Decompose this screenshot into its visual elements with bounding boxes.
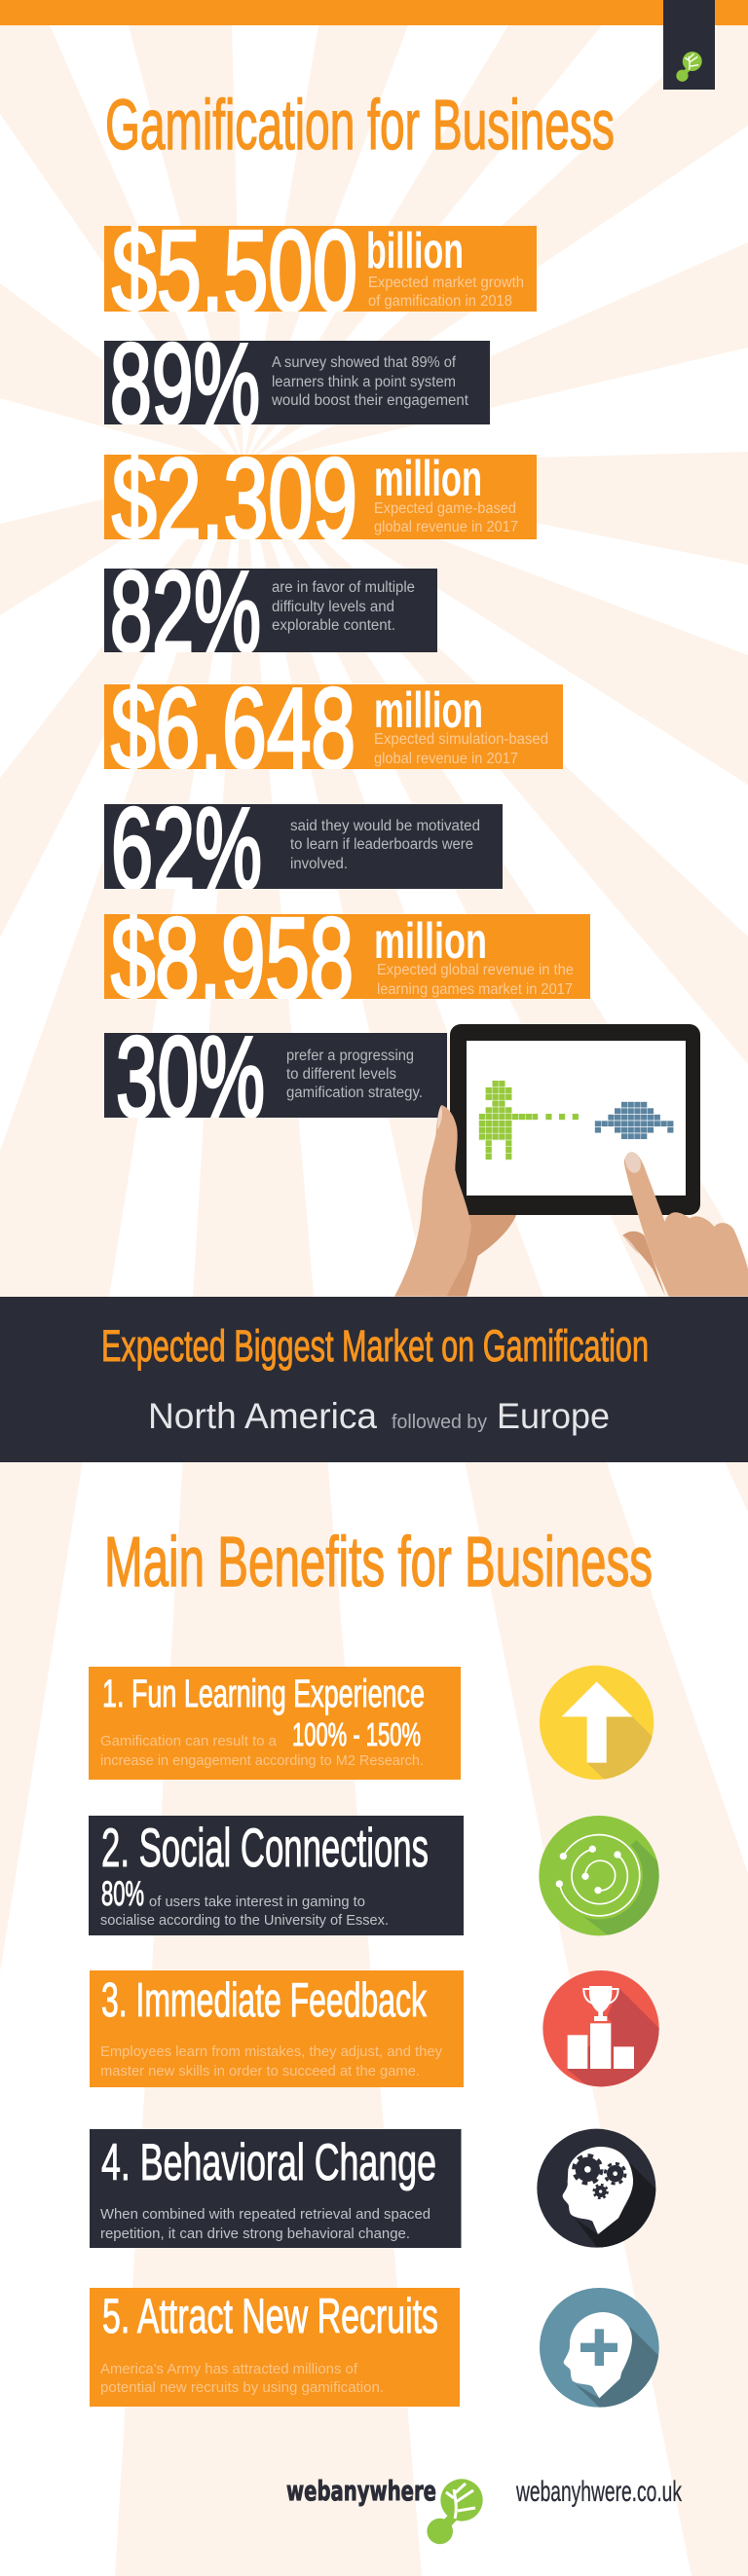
stat: $5,500 billion: billion [366, 223, 464, 279]
benefit 1 card [89, 1667, 461, 1780]
stat: $5,500 billion: $5,500 [112, 207, 357, 336]
stat: 30% [104, 1033, 447, 1118]
stat: $8,958 million: million [374, 913, 487, 970]
stat: $8,958 million: Expected global revenue in the [377, 962, 574, 978]
icon: head with plus [540, 2288, 659, 2408]
benefit 3 card: master new skills in order to succeed at the game. [100, 2064, 420, 2079]
stat: 62%: said they would be motivated [290, 818, 480, 834]
market banner [0, 1297, 748, 1462]
followed by: followed by [392, 1412, 487, 1433]
benefit 4 card: 4. Behavioral Change [101, 2134, 436, 2191]
North America: North America [148, 1396, 377, 1436]
stat: 82%: difficulty levels and [272, 599, 394, 615]
dark logo tab [663, 0, 715, 90]
stat: $5,500 billion [104, 226, 537, 312]
stat: 30%: to different levels [286, 1066, 396, 1083]
benefit 5 card: America's Army has attracted millions of [100, 2362, 358, 2377]
benefit 2 card: 2. Social Connections [101, 1817, 429, 1878]
tablet screen [467, 1041, 686, 1196]
benefit 4 card: When combined with repeated retrieval and spaced [100, 2207, 430, 2223]
benefit 2 card: socialise according to the University of Essex. [100, 1913, 389, 1929]
stat: 62%: 62% [111, 785, 262, 913]
benefit 5 card: 5. Attract New Recruits [102, 2289, 438, 2343]
stat: $5,500 billion: Expected market growth [368, 275, 524, 291]
stat: 89% [104, 341, 490, 424]
icon: yellow up arrow [540, 1665, 654, 1780]
stat: $5,500 billion: of gamification in 2018 [368, 293, 512, 310]
stat: 30%: prefer a progressing [286, 1048, 414, 1064]
webanywhere wordmark: webanywhere [286, 2475, 436, 2507]
stat: $6,648 million: million [374, 682, 483, 739]
stat: $2,309 million: $2,309 [112, 435, 357, 564]
stat: $2,309 million [104, 455, 537, 539]
benefit 3 card [90, 1970, 464, 2087]
icon: green network circles [539, 1816, 659, 1935]
benefit 3 card: Employees learn from mistakes, they adjust, and they [100, 2044, 443, 2060]
benefit 1 card: 1. Fun Learning Experience [102, 1673, 425, 1715]
stat: $2,309 million: Expected game-based [374, 500, 516, 517]
benefit 2 card: 80% [101, 1875, 144, 1913]
stat: 89%: would boost their engagement [271, 392, 469, 409]
stat: 62%: involved. [290, 856, 348, 872]
stat: $8,958 million [104, 914, 590, 999]
benefit 1 card: 100% - 150% [292, 1716, 421, 1752]
stat: 82%: explorable content. [272, 617, 395, 634]
tablet body [450, 1024, 700, 1215]
stat: 82%: are in favor of multiple [272, 579, 415, 596]
benefit 2 card [89, 1816, 464, 1935]
tablet illustration with hands [394, 1024, 748, 1297]
stat: 82%: 82% [110, 548, 261, 677]
benefit 1 card: increase in engagement according to M2 Research. [100, 1753, 424, 1769]
stat: 89%: 89% [110, 320, 260, 449]
stat: 89%: learners think a point system [272, 374, 456, 390]
pixel alien [595, 1102, 674, 1139]
icon: head with gears [537, 2128, 656, 2248]
stat: $8,958 million: $8,958 [111, 895, 354, 1023]
benefit 4 card [90, 2129, 462, 2248]
benefit 5 card [90, 2288, 460, 2407]
stat: 62% [104, 804, 503, 889]
stat: 89%: A survey showed that 89% of [272, 354, 457, 371]
benefit 5 card: potential new recruits by using gamification. [100, 2380, 384, 2396]
stat: 30%: gamification strategy. [286, 1085, 423, 1101]
footer brand [286, 2475, 683, 2544]
stat: 62%: to learn if leaderboards were [290, 836, 473, 853]
icon: small leaf logo [676, 52, 702, 82]
benefit 1 card: Gamification can result to a [100, 1734, 278, 1749]
stat: 30%: 30% [116, 1013, 265, 1142]
stat: $6,648 million: Expected simulation-based [374, 731, 548, 748]
left hand [394, 1105, 471, 1297]
stat: $6,648 million [104, 684, 563, 769]
stat: $8,958 million: learning games market in 2017 [377, 981, 573, 998]
top orange band [0, 0, 748, 25]
benefit 2 card: of users take interest in gaming to [149, 1895, 365, 1910]
pixel hero [479, 1081, 579, 1160]
Europe: Europe [497, 1396, 610, 1436]
stat: $2,309 million: million [374, 451, 482, 507]
benefit 4 card: repetition, it can drive strong behavioral change. [100, 2226, 410, 2242]
stat: 82% [104, 569, 437, 652]
benefit 3 card: 3. Immediate Feedback [101, 1974, 427, 2027]
stat: $2,309 million: global revenue in 2017 [374, 519, 518, 535]
stat: $6,648 million: $6,648 [111, 665, 355, 793]
icon: red trophy podium [542, 1970, 659, 2087]
icon: leaf logo [427, 2479, 483, 2544]
stat: $6,648 million: global revenue in 2017 [374, 751, 518, 767]
right hand [622, 1150, 748, 1297]
